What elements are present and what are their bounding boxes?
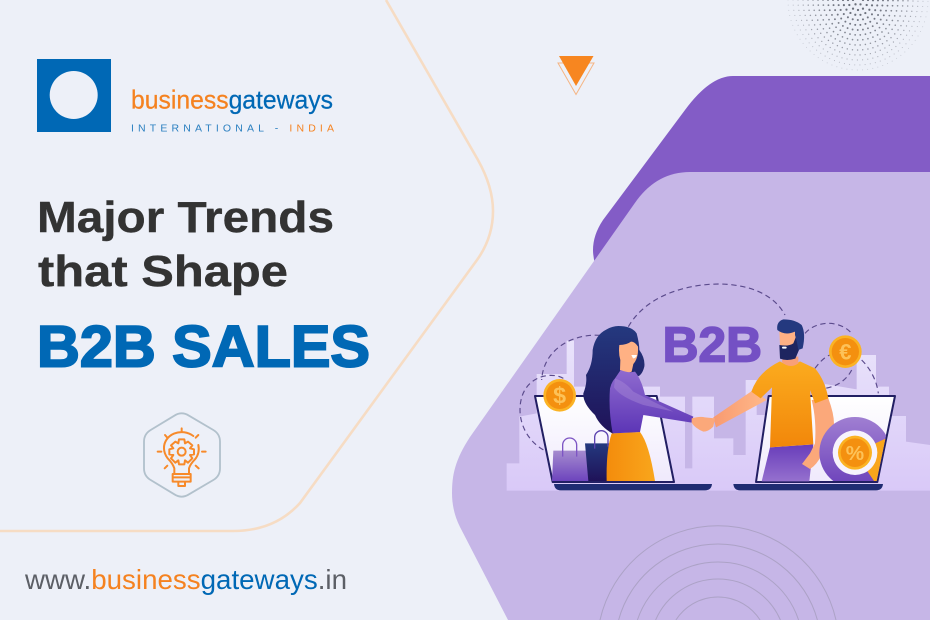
illustration: B2B handshake bbox=[507, 284, 930, 491]
title bbox=[37, 193, 370, 380]
man's hair bbox=[777, 319, 804, 350]
heading line 3: B2B SALES bbox=[37, 314, 370, 380]
icon: orange triangle bbox=[558, 56, 594, 94]
shopping bags bbox=[552, 431, 610, 481]
gear centre bbox=[178, 448, 186, 456]
bulb bbox=[164, 432, 199, 474]
dollar rim bbox=[543, 379, 576, 412]
dollar coin bbox=[543, 379, 576, 412]
hair bbox=[583, 326, 644, 434]
percent coin bbox=[833, 430, 877, 475]
concentric arcs bbox=[600, 526, 836, 620]
logo tagline: INTERNATIONAL - INDIA bbox=[131, 122, 334, 134]
mouth bbox=[782, 347, 787, 349]
logo circle bbox=[50, 71, 98, 119]
rays bbox=[158, 428, 206, 468]
B2B label: B2B bbox=[663, 319, 762, 373]
logo wordmark: businessgateways bbox=[131, 84, 333, 114]
purple bag handle bbox=[563, 438, 577, 457]
light purple shape bbox=[452, 172, 930, 620]
woman bbox=[583, 326, 693, 481]
right screen bbox=[756, 396, 895, 482]
percent sign: % bbox=[846, 442, 864, 465]
beard bbox=[779, 337, 799, 360]
right base bbox=[733, 484, 883, 490]
heading line 2: that Shape bbox=[38, 247, 288, 296]
handshake bbox=[692, 417, 715, 432]
navy bag handle bbox=[595, 431, 608, 449]
euro rim bbox=[829, 335, 862, 368]
euro coin bbox=[829, 335, 862, 368]
hanging arm bbox=[802, 398, 834, 469]
hexagon badge bbox=[144, 413, 220, 497]
dollar face bbox=[546, 382, 573, 409]
orange wedge bbox=[868, 438, 886, 481]
gear bbox=[169, 439, 194, 464]
man's face bbox=[779, 332, 796, 358]
top and arm bbox=[610, 370, 693, 433]
icon: light bulb with gear bbox=[144, 413, 220, 497]
dashed connectors bbox=[520, 284, 878, 451]
bulb base bbox=[173, 474, 191, 486]
logo bbox=[37, 59, 334, 134]
man bbox=[713, 319, 834, 481]
shaking arm bbox=[713, 390, 767, 427]
neck bbox=[782, 357, 798, 366]
smile bbox=[631, 355, 637, 358]
city skyline bbox=[507, 341, 930, 491]
coin bbox=[838, 436, 872, 470]
sleeve highlight bbox=[614, 378, 673, 412]
halftone dot circle bbox=[788, 0, 928, 70]
left base bbox=[554, 484, 712, 490]
shirt bbox=[751, 361, 828, 447]
logo mark bbox=[37, 59, 111, 132]
euro face bbox=[832, 338, 859, 365]
cream outline panel bbox=[0, 0, 493, 531]
navy bag bbox=[585, 443, 610, 481]
percent chart bbox=[819, 417, 886, 481]
left laptop bbox=[535, 396, 712, 490]
purple bag bbox=[552, 451, 589, 481]
white disc bbox=[833, 430, 877, 475]
man's pants bbox=[762, 444, 813, 481]
coin inner bbox=[841, 438, 869, 467]
pants bbox=[607, 432, 655, 481]
heading line 1: Major Trends bbox=[37, 193, 334, 242]
euro sign: € bbox=[839, 339, 851, 364]
right laptop bbox=[733, 396, 895, 490]
website url: www.businessgateways.in bbox=[24, 564, 347, 595]
dark purple shape bbox=[593, 76, 930, 264]
donut bbox=[819, 417, 886, 481]
face bbox=[619, 342, 638, 373]
left screen bbox=[535, 396, 674, 482]
dollar sign: $ bbox=[553, 383, 566, 409]
